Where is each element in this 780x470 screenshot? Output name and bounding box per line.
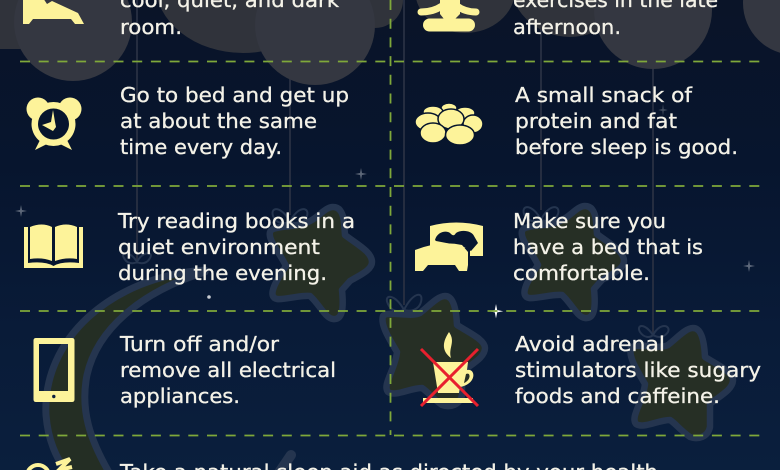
star left: [270, 207, 372, 319]
sparkles: [15, 104, 755, 318]
left column text: at about the same: [120, 109, 317, 133]
icon: open book: [24, 224, 83, 268]
icon: sleep aid partial: [27, 459, 72, 470]
left column text: room.: [120, 15, 182, 39]
right column text: foods and caffeine.: [515, 384, 720, 408]
star top right: [522, 206, 624, 318]
right column text: comfortable.: [513, 261, 650, 285]
left column text: [117, 0, 355, 408]
right column text: Avoid adrenal: [515, 332, 665, 356]
left column text: Go to bed and get up: [120, 83, 349, 107]
right column text: have a bed that is: [513, 235, 703, 259]
icon: alarm clock: [26, 98, 82, 150]
left column text: time every day.: [120, 135, 282, 159]
left column text: during the evening.: [118, 261, 327, 285]
star middle: [382, 296, 485, 406]
star bottom right: [630, 328, 733, 438]
icon: meditation: [421, 0, 476, 32]
icon: comfortable bed: [415, 222, 483, 271]
left column text: Turn off and/or: [119, 332, 280, 356]
right column text: [513, 0, 761, 408]
right column text: afternoon.: [513, 15, 621, 39]
right column text: stimulators like sugary: [515, 358, 761, 382]
clouds: [0, 0, 780, 85]
left column text: quiet environment: [118, 235, 320, 259]
left column text: remove all electrical: [120, 358, 336, 382]
front cloud layer: [14, 0, 780, 85]
icon: bed: [23, 0, 84, 24]
moon stem: [278, 455, 291, 470]
left column text: appliances.: [120, 384, 240, 408]
left column text: Try reading books in a: [117, 209, 355, 233]
right column text: before sleep is good.: [515, 135, 738, 159]
back cloud layer: [0, 0, 632, 53]
hanging strings: [137, 0, 653, 335]
right column text: A small snack of: [515, 83, 693, 107]
bows: [123, 207, 669, 337]
right column text: protein and fat: [515, 109, 677, 133]
icon: crossed-out coffee: [421, 332, 478, 406]
right column text: Make sure you: [513, 209, 666, 233]
icon: tablet: [34, 338, 74, 402]
icon: snack: [415, 103, 483, 145]
stars: [270, 206, 733, 438]
moon crescent: [46, 270, 205, 470]
